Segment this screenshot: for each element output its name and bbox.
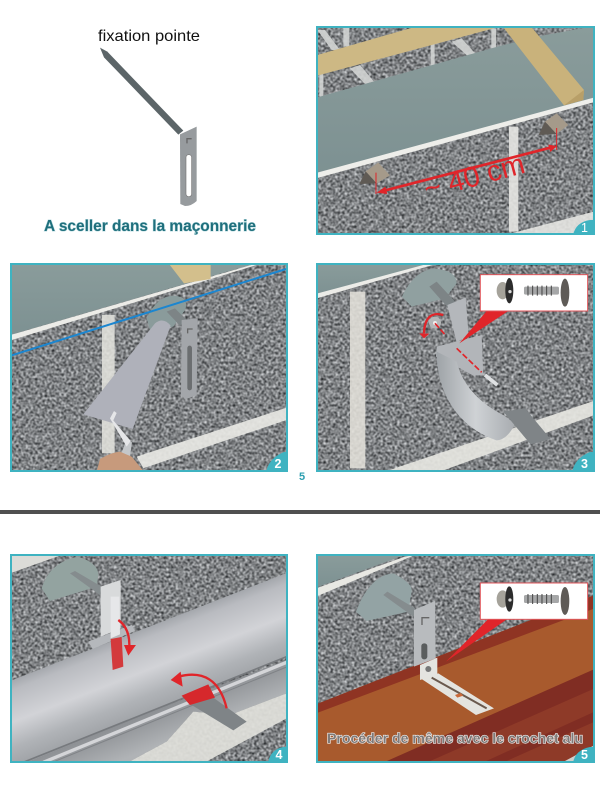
- brackets: [366, 163, 390, 183]
- badge: step 5: [573, 747, 595, 763]
- red gutter: [316, 595, 595, 770]
- icon: fixation spike bracket: [100, 48, 197, 206]
- panel: step 2 mortar trowel: [10, 263, 288, 472]
- label: 40 cm: ~ 40 cm: [421, 148, 528, 206]
- badge: step 3: [572, 452, 595, 472]
- roof board: [317, 26, 595, 175]
- panel: step 4 gutter in hanger: [10, 554, 288, 765]
- measuring arrow: [376, 128, 557, 194]
- badge: step 1: [573, 220, 595, 235]
- caption: proceder de meme: Procéder de même avec le crochet alu: [327, 731, 583, 746]
- timber rafters: [317, 27, 497, 76]
- inset: screw and nut: [480, 583, 588, 619]
- badge: step 2: 2: [275, 457, 282, 471]
- badge: step 5: 5: [581, 748, 588, 762]
- section divider: [0, 510, 600, 514]
- caption: a sceller dans la maconnerie: A sceller dans la maçonnerie: [44, 218, 256, 235]
- heading: fixation pointe: fixation pointe: [98, 28, 200, 45]
- gutter underside: [30, 660, 286, 761]
- badge: step 1: 1: [581, 221, 588, 235]
- white mortar edge: [317, 97, 595, 178]
- badge: step 2: [266, 452, 288, 472]
- badge: step 4: [268, 747, 288, 763]
- page number: 5: [299, 471, 305, 483]
- screw callout wedge: [459, 311, 508, 343]
- screw callout wedge: [446, 619, 507, 662]
- badge: step 4: 4: [276, 748, 283, 762]
- gutter body: [10, 573, 287, 765]
- hook bracket: [356, 573, 412, 621]
- badge: step 3: 3: [581, 457, 588, 471]
- mortar band: [131, 694, 286, 761]
- vertical mortar: [509, 127, 518, 232]
- panel: step 3 gutter hanger: [316, 263, 595, 472]
- panel: step 5 alu hook: [316, 554, 595, 770]
- inset: screw and nut: [480, 275, 588, 311]
- panel: step 1 spacing: [316, 26, 595, 235]
